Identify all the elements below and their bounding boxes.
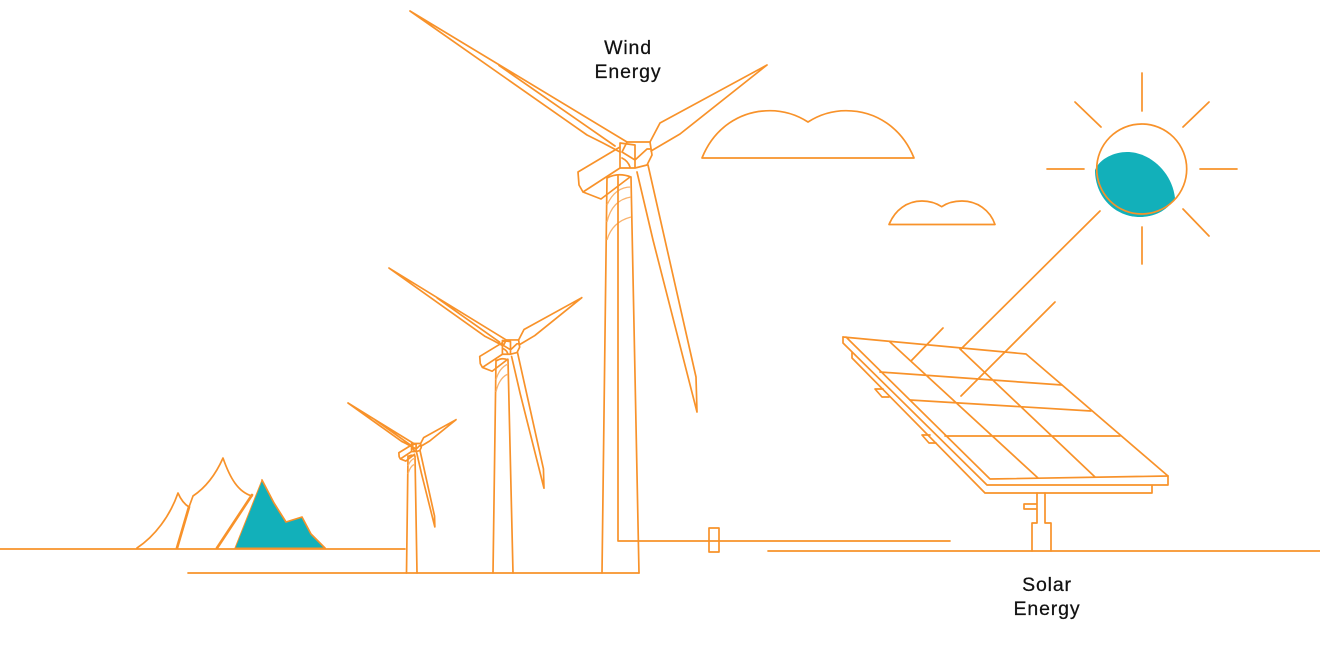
sun rays xyxy=(1047,73,1237,264)
heading: wind energy: Wind xyxy=(604,37,652,59)
rotor and nacelle xyxy=(410,11,767,412)
panel frame xyxy=(843,337,1168,493)
rotor and nacelle xyxy=(348,403,456,527)
panel grid xyxy=(880,342,1120,478)
small wind turbine xyxy=(348,403,456,573)
sun disc xyxy=(1097,124,1187,214)
cloud: small xyxy=(889,201,995,224)
tower xyxy=(493,359,513,573)
heading: solar energy: Solar xyxy=(1022,574,1072,596)
brackets xyxy=(875,389,936,443)
rotor and nacelle xyxy=(389,268,582,488)
tower xyxy=(602,175,639,573)
medium wind turbine xyxy=(389,268,582,573)
panel surface xyxy=(843,337,1168,479)
sunlight rays to panel xyxy=(911,211,1100,396)
power cable with connector xyxy=(618,175,950,552)
large wind turbine xyxy=(410,11,767,573)
heading: wind energy: Energy xyxy=(595,61,661,83)
heading: solar energy: Energy xyxy=(1014,598,1080,620)
panel stand xyxy=(1024,493,1051,551)
ground lines xyxy=(0,549,1320,573)
solar panel xyxy=(843,337,1168,551)
tower xyxy=(406,455,417,573)
icon: sun xyxy=(1047,73,1237,264)
cloud: large xyxy=(702,111,914,158)
mountains xyxy=(137,458,325,548)
connector xyxy=(709,528,719,552)
sun shading xyxy=(1095,152,1175,217)
mountain outlines xyxy=(137,458,325,548)
mountain: teal peak xyxy=(235,480,325,548)
